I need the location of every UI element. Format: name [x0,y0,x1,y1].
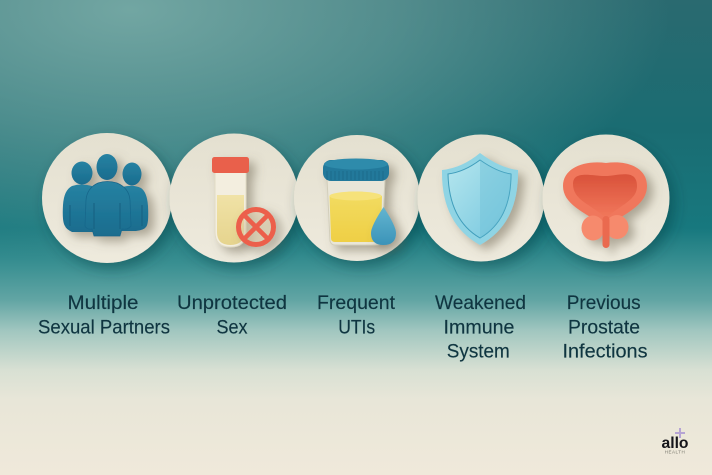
icon: shield [442,153,518,245]
label: unprotected: Unprotected [177,292,287,314]
icon: specimen cup with drop [323,158,396,245]
panel: unprotected sex [170,134,298,262]
label: previous: Previous [567,292,641,314]
icon: water drop [371,207,396,245]
label: infections: Infections [562,341,648,363]
logo: allo health: HEALTH [665,450,685,454]
label: sexual partners: Sexual Partners [38,316,170,338]
label: weakened: Weakened [435,292,526,314]
logo: allo health: allo [662,435,689,452]
label: sex: Sex [216,316,248,338]
panel: previous prostate infections [542,134,670,262]
logo: allo health [662,428,689,454]
label: immune: Immune [444,316,514,338]
panel: weakened immune system [418,134,544,262]
label: system: System [447,341,510,363]
panel: multiple sexual partners [42,133,172,263]
label: prostate: Prostate [568,316,640,338]
icon: group of people [63,154,148,236]
label: multiple: Multiple [68,292,138,314]
labels [38,292,648,363]
icon: prostate [563,162,647,248]
icon: test tube with prohibition sign [212,157,274,247]
label: frequent: Frequent [317,292,396,314]
panel: frequent UTIs [294,135,420,261]
label: UTIs: UTIs [338,316,375,338]
